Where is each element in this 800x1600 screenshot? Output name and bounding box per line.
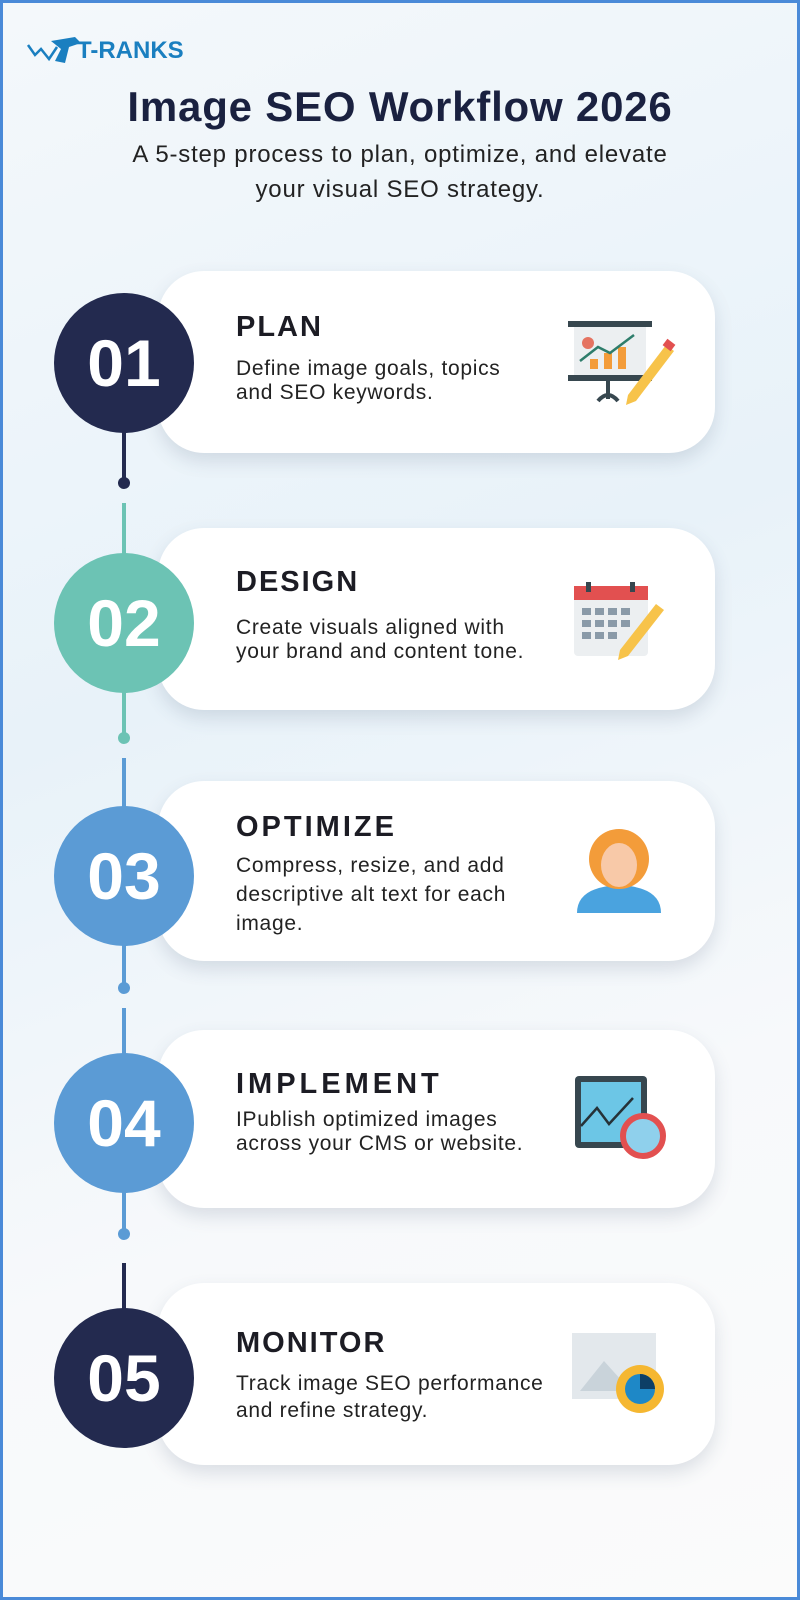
circle: 02 [54, 553, 194, 693]
heading: optimize: OPTIMIZE [236, 811, 397, 843]
heading: monitor: MONITOR [236, 1327, 386, 1359]
logo [27, 37, 184, 64]
text: plan [236, 357, 500, 404]
text: optimize: image. [236, 912, 303, 935]
icon: person [577, 829, 661, 913]
text: monitor: and refine strategy. [236, 1399, 428, 1422]
subtitle: A 5-step process to plan, optimize, and elevate [132, 141, 668, 168]
text: implement: IPublish optimized images [236, 1108, 497, 1131]
text: design: your brand and content tone. [236, 640, 524, 663]
connectors [122, 403, 126, 481]
text: optimize: Compress, resize, and add [236, 854, 504, 877]
heading: design: DESIGN [236, 566, 359, 598]
circle: 04 [54, 1053, 194, 1193]
heading: plan: PLAN [236, 311, 323, 343]
text: plan: Define image goals, topics [236, 357, 500, 380]
icon: tablet chart [575, 1076, 666, 1159]
icon: image with pie [572, 1333, 664, 1413]
text: design: Create visuals aligned with [236, 616, 505, 639]
panel: step 1 [158, 271, 715, 453]
subtitle: your visual SEO strategy. [256, 176, 544, 203]
text: implement: across your CMS or website. [236, 1132, 523, 1155]
text: plan: and SEO keywords. [236, 381, 434, 404]
text: design [236, 616, 524, 663]
circle: 05: 05 [87, 1341, 161, 1415]
text: implement [236, 1108, 523, 1155]
text: optimize [236, 854, 506, 935]
heading: implement: IMPLEMENT [236, 1068, 443, 1100]
panel: step 4 [158, 1030, 715, 1208]
panel: step 5 [158, 1283, 715, 1465]
title: Image SEO Workflow 2026 [127, 83, 673, 130]
circle: 02: 02 [87, 586, 161, 660]
icon: presentation board [568, 321, 676, 405]
panel: step 2 [158, 528, 715, 710]
panel: step 3 [158, 781, 715, 961]
circle: 03: 03 [87, 839, 161, 913]
circle: 01 [54, 293, 194, 433]
circle: 01: 01 [87, 326, 161, 400]
text: monitor: Track image SEO performance [236, 1372, 544, 1395]
circle: 03 [54, 806, 194, 946]
subtitle [132, 141, 668, 203]
circle: 05 [54, 1308, 194, 1448]
icon: calendar [574, 582, 664, 660]
text: monitor [236, 1372, 544, 1422]
text: optimize: descriptive alt text for each [236, 883, 506, 906]
circle: 04: 04 [87, 1086, 161, 1160]
logo: T-RANKS [77, 37, 184, 64]
